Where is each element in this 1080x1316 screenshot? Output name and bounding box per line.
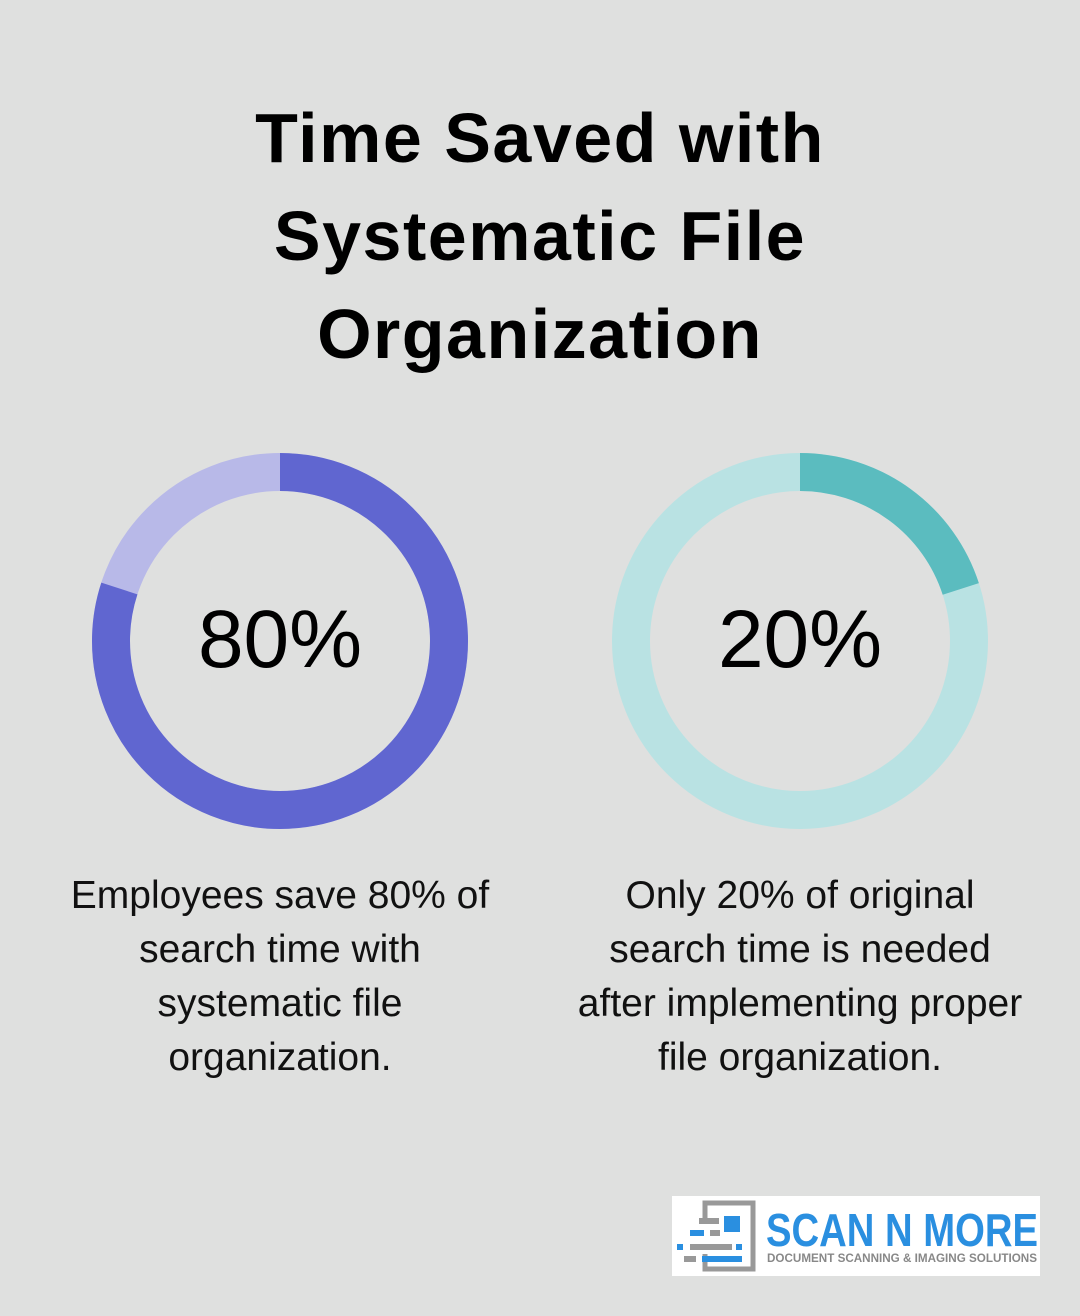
text left: search time with	[139, 928, 421, 971]
title	[255, 99, 825, 373]
logo: DOCUMENT SCANNING & IMAGING SOLUTIONS	[767, 1251, 1037, 1265]
title: Systematic File	[274, 197, 806, 275]
donut left: 80%	[198, 594, 362, 685]
donut left	[111, 472, 449, 810]
text right: Only 20% of original	[625, 874, 975, 917]
donut right: 20%	[718, 594, 882, 685]
text right	[578, 874, 1022, 1079]
title: Organization	[317, 295, 763, 373]
text left: systematic file	[158, 982, 402, 1025]
logo	[672, 1196, 1040, 1276]
text left	[71, 874, 490, 1079]
text left: Employees save 80% of	[71, 874, 489, 917]
text left: organization.	[168, 1036, 392, 1079]
donut right	[631, 472, 969, 810]
text right: after implementing proper	[578, 982, 1022, 1025]
text right: file organization.	[658, 1036, 942, 1079]
title: Time Saved with	[255, 99, 825, 177]
text right: search time is needed	[609, 928, 991, 971]
